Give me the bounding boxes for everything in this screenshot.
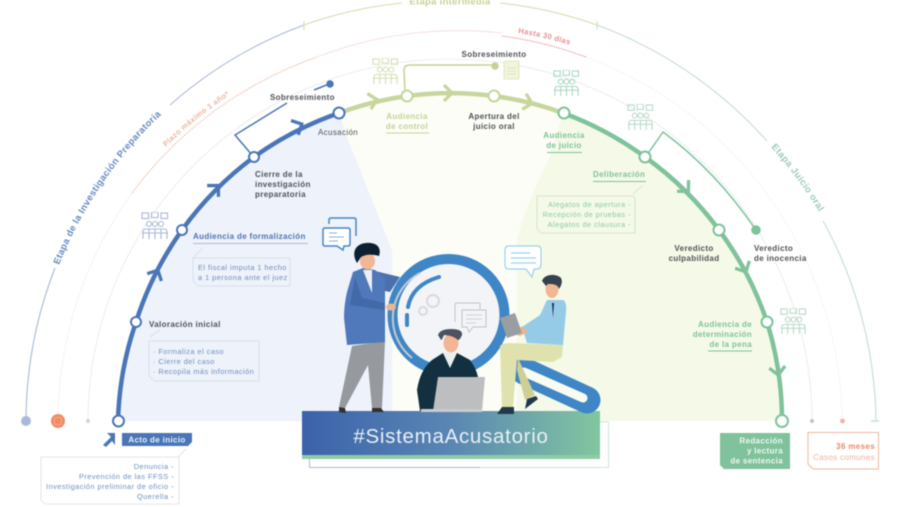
label: audiencia de formalizacion: Audiencia de formalización	[193, 232, 306, 241]
label: audiencia de determinacion: determinación	[693, 330, 752, 339]
box: inicio options: Denuncia -	[134, 462, 174, 471]
label: audiencia de determinacion: Audiencia de	[698, 320, 752, 329]
label: apertura: Apertura del	[468, 112, 520, 121]
panel: trial sector background	[517, 113, 782, 421]
stage label: trial: Etapa Juicio oral	[771, 143, 825, 212]
main path: intermediate segment	[339, 93, 563, 113]
person: center with laptop	[417, 329, 485, 412]
label: veredicto inocencia: de inocencia	[754, 254, 807, 263]
arrows: intermediate	[367, 85, 534, 111]
person: right	[497, 275, 566, 414]
label: acusacion: Acusación	[318, 128, 358, 137]
icon: document	[504, 61, 519, 79]
label: deliberacion: Deliberación	[593, 170, 645, 179]
box: 36 meses	[808, 432, 878, 469]
box: inicio options: Prevención de las FFSS -	[79, 472, 174, 481]
banner: hashtag: #SistemaAcusatorio	[353, 425, 549, 448]
icon: chat bubble right	[505, 246, 541, 277]
branch: veredicto de inocencia	[649, 132, 760, 234]
label: audiencia de determinacion: de la pena	[709, 340, 752, 349]
label: apertura: juicio oral	[472, 122, 515, 131]
icon: people group control	[373, 58, 398, 84]
label: sobreseimiento intermedio: Sobreseimiento	[462, 50, 526, 59]
deadline arc: orange dotted	[58, 31, 842, 421]
icon: people group formalizacion	[142, 212, 168, 239]
main path: blue segment	[118, 113, 339, 421]
person: left	[339, 243, 400, 413]
icon: chat bubbles blue	[323, 218, 356, 250]
box: redaccion: y lectura	[747, 446, 783, 456]
box: alegatos: Recepción de pruebas -	[543, 210, 631, 219]
box: 36 meses: Casos comunes	[813, 453, 875, 462]
outer stage arc: preparatory	[26, 25, 304, 421]
label: audiencia de control	[386, 112, 429, 133]
box: valoracion: · Recopila más información	[153, 367, 254, 376]
label: veredicto culpabilidad: culpabilidad	[669, 254, 719, 263]
arrows: blue	[147, 117, 305, 281]
inner thin arc	[88, 59, 812, 421]
panel: blue sector background	[118, 113, 392, 421]
box: inicio options: Investigación preliminar de oficio -	[46, 482, 174, 491]
box: alegatos: Alegatos de apertura -	[548, 200, 631, 209]
box: alegatos	[537, 185, 643, 233]
banner: hashtag	[302, 411, 608, 468]
panel: intermediate sector background	[339, 93, 563, 421]
box: inicio options	[41, 449, 186, 504]
icon: people group juicio	[554, 70, 579, 96]
base dots	[21, 414, 879, 428]
deadline label: one year: Plazo máximo 1 año*	[162, 91, 228, 147]
label: veredicto culpabilidad: Veredicto	[674, 244, 714, 253]
icon: arrow start	[103, 433, 115, 447]
box: redaccion: Redacción	[739, 436, 783, 446]
label: cierre: investigación	[255, 180, 311, 189]
box: redaccion: de sentencia	[730, 456, 783, 466]
box: valoracion	[149, 330, 259, 381]
box: fiscal: a 1 persona ante el juez	[198, 273, 288, 282]
label: cierre: preparatoria	[255, 190, 306, 199]
label: audiencia de juicio: Audiencia	[543, 131, 585, 140]
label: veredicto inocencia: Veredicto	[754, 244, 793, 253]
icon: people group pena	[781, 308, 806, 334]
box: valoracion: · Cierre del caso	[153, 357, 215, 366]
label: audiencia de control: Audiencia	[386, 112, 428, 121]
icon: people group deliberacion	[628, 104, 653, 130]
magnifier	[392, 259, 587, 400]
box: redaccion	[720, 433, 790, 469]
branch: sobreseimiento preparatory	[235, 81, 333, 155]
label: acto de inicio	[122, 433, 192, 446]
label: valoracion: Valoración inicial	[149, 320, 221, 329]
label: cierre: Cierre de la	[255, 170, 303, 179]
label: sobreseimiento: Sobreseimiento	[270, 93, 335, 102]
box: inicio options: Querella -	[137, 492, 174, 501]
main path: trial segment	[563, 113, 782, 421]
arrows: trial	[677, 180, 786, 376]
box: 36 meses: 36 meses	[836, 442, 875, 451]
outer stage arc: intermediate	[304, 3, 597, 30]
label: acto de inicio: Acto de inicio	[128, 436, 186, 444]
outer stage arc: trial	[597, 25, 876, 421]
deadline label: thirty days: Hasta 30 días	[518, 28, 570, 45]
nodes	[113, 90, 788, 427]
box: fiscal	[193, 248, 290, 286]
label: audiencia de determinacion	[693, 320, 752, 351]
label: audiencia de control: de control	[386, 122, 428, 131]
box: fiscal: El fiscal imputa 1 hecho	[198, 263, 287, 272]
label: audiencia de juicio	[543, 131, 585, 152]
stage label: investigation: Etapa de la Investigación Preparatoria	[52, 112, 162, 265]
branch: sobreseimiento intermediate	[404, 63, 498, 92]
label: audiencia de juicio: de juicio	[546, 141, 582, 150]
box: alegatos: Alegatos de clausura -	[548, 220, 631, 229]
box: valoracion: · Formaliza el caso	[153, 347, 224, 356]
